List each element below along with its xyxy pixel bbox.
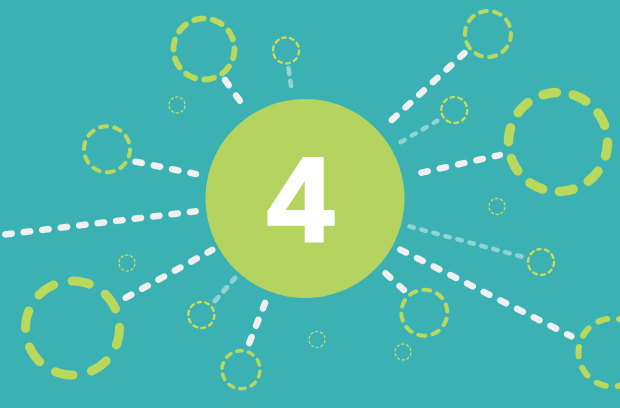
connector: lower-right circle <box>386 273 404 290</box>
dashed circle: tiny right <box>488 197 506 216</box>
connector: top small circle <box>288 68 291 86</box>
connector: lower-left big circle <box>126 250 212 298</box>
dashed circle: tiny upper left <box>168 96 186 114</box>
connector: top-right circle <box>392 53 464 120</box>
dashed circle: lower left big <box>18 274 127 382</box>
dashed circle: right big <box>501 85 615 199</box>
dashed circle: lower right <box>399 287 450 338</box>
connector: top-left circle <box>225 80 240 101</box>
dashed circle: tiny lower left <box>118 254 136 272</box>
connector: upper-left circle <box>135 162 196 174</box>
dashed circle: upper left <box>81 123 133 176</box>
dashed circle: top left <box>169 14 239 84</box>
connector: long white line to bottom-right <box>400 250 571 336</box>
dashed circle: bottom <box>220 349 262 390</box>
dashed circle: tiny bottom centre <box>308 330 326 349</box>
connector: long teal line <box>410 226 522 257</box>
dashed circle: bottom right, cropped <box>570 310 620 395</box>
dashed circle: right small <box>439 95 469 125</box>
central green circle <box>206 99 404 298</box>
number 4: 4 <box>267 134 334 266</box>
connector: right small circle <box>401 121 437 142</box>
connector: lower small circle <box>215 278 235 301</box>
dashed circle: right teal-line end <box>526 247 556 277</box>
dashed circle: top right <box>461 7 515 61</box>
connector: right big circle <box>421 155 500 173</box>
connector: bottom circle <box>249 303 265 343</box>
central circle with number <box>206 99 404 298</box>
connector: long left line <box>5 211 196 234</box>
dashed circle: tiny lower right <box>394 343 412 361</box>
dashed circle: top small <box>271 35 301 66</box>
dashed circle: lower small <box>186 300 216 330</box>
